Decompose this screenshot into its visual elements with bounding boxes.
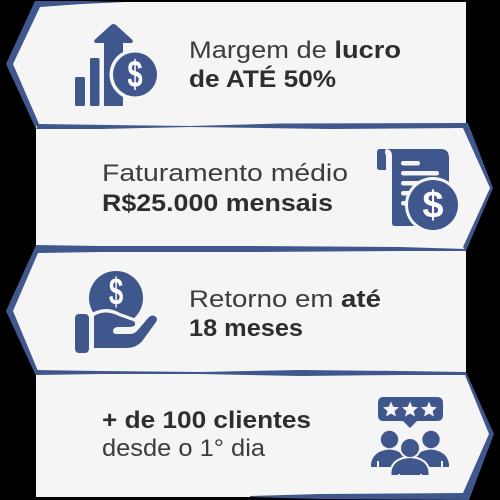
icon: receipt with dollar coin [377, 149, 461, 233]
text: revenue label: Faturamento médio [102, 160, 348, 187]
icon: hand holding coin [75, 271, 157, 353]
panel: average revenue [36, 123, 493, 251]
text: margin value: de ATÉ 50% [189, 65, 336, 93]
icon: rising bars with dollar coin: $ [127, 54, 143, 96]
heading: margin text: Margem de lucro [189, 37, 401, 64]
text: clients label: desde o 1° dia [102, 435, 266, 462]
panel: clients [36, 370, 494, 500]
icon: receipt with dollar coin: $ [422, 184, 444, 226]
text: payback value: 18 meses [189, 315, 303, 342]
icon: group with star rating bubble [371, 397, 449, 476]
panel: profit margin [6, 1, 466, 129]
text: revenue value: R$25.000 mensais [102, 190, 333, 217]
panel: payback period [6, 245, 466, 376]
text: clients value: + de 100 clientes [102, 407, 311, 434]
text: payback label: Retorno em até [189, 286, 381, 313]
icon: hand holding coin: $ [109, 271, 123, 313]
icon: rising bars with dollar coin [75, 24, 160, 106]
